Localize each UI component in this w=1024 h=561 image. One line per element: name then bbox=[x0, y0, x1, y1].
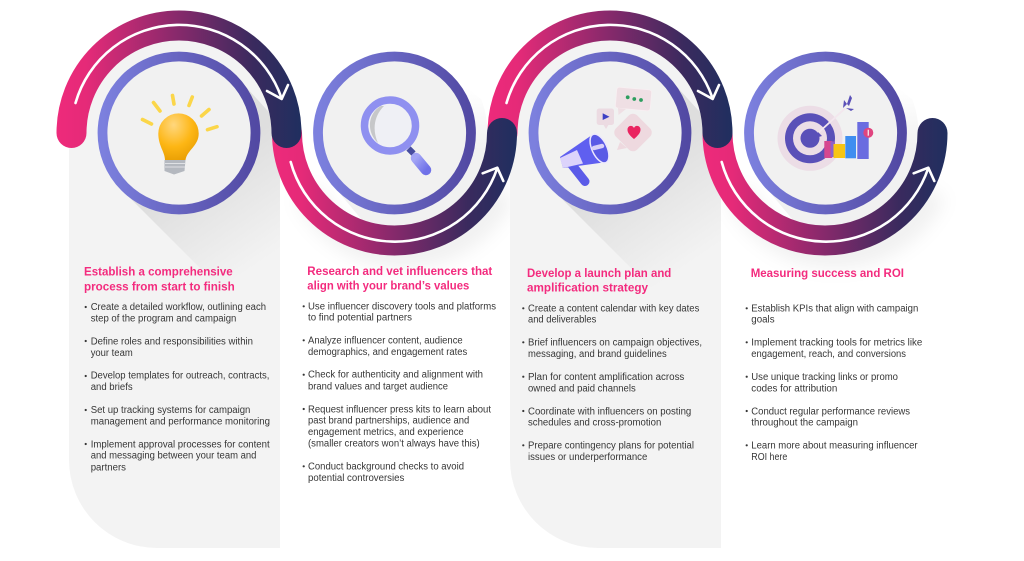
bullet: analyze: Analyze influencer content, audience bbox=[308, 336, 463, 347]
bullet: press kits: past brand partnerships, audience and bbox=[308, 416, 469, 427]
long shadow of circle 2 bbox=[340, 124, 487, 226]
bullet: roles: Define roles and responsibilities within bbox=[91, 336, 253, 347]
bullet: amplification: Plan for content amplification across bbox=[528, 372, 684, 383]
bullet: brief influencers: messaging, and brand guidelines bbox=[528, 349, 667, 360]
bullet: coordinate bbox=[522, 406, 691, 429]
bullet: learn more: Learn more about measuring influencer bbox=[751, 441, 918, 452]
bullet: templates: Develop templates for outreach, contracts, bbox=[91, 371, 269, 382]
bullet: discovery tools: Use influencer discovery tools and platforms bbox=[308, 301, 496, 312]
circle 3 bbox=[534, 56, 686, 210]
bullet: reviews: Conduct regular performance reviews bbox=[751, 406, 910, 417]
circle 2 bbox=[318, 56, 471, 210]
bullet: roles bbox=[85, 336, 253, 359]
band 2 bbox=[287, 133, 502, 240]
bullet: tracking: management and performance monitoring bbox=[91, 416, 270, 427]
bullet: tracking: Set up tracking systems for campaign bbox=[91, 405, 250, 416]
bullet: tracking tools: engagement, reach, and conversions bbox=[751, 349, 906, 360]
icon: light bulb bbox=[142, 96, 217, 174]
bullet: tracking tools bbox=[746, 338, 923, 360]
bullet: content calendar bbox=[522, 303, 699, 326]
bullet: approvals: and messaging between your team and bbox=[91, 451, 256, 462]
bullet: coordinate: schedules and cross-promotion bbox=[528, 418, 661, 429]
bullet: press kits: Request influencer press kits to learn about bbox=[308, 404, 491, 415]
bullet: roles: your team bbox=[91, 348, 133, 359]
panel background 3 bbox=[510, 33, 721, 548]
band 4 bbox=[718, 133, 932, 240]
heading: step 1: Establish a comprehensive bbox=[84, 265, 233, 279]
bullet: tracking links: codes for attribution bbox=[751, 383, 837, 394]
arrow on band 3 bbox=[506, 25, 719, 103]
bullet: background checks: potential controversies bbox=[308, 473, 404, 484]
bullet: press kits: engagement metrics, and experience bbox=[308, 427, 464, 438]
heading: step 2: align with your brand’s values bbox=[307, 279, 470, 293]
heading: step 4: Measuring success and ROI bbox=[751, 266, 904, 280]
bullet: workflow: step of the program and campaign bbox=[91, 314, 236, 325]
bullet: templates: and briefs bbox=[91, 382, 133, 393]
shadow under band 2 bbox=[307, 192, 502, 255]
bullet: press kits bbox=[303, 404, 491, 450]
band 1 bbox=[72, 26, 286, 133]
bullet: background checks bbox=[303, 462, 464, 484]
bullet: amplification: owned and paid channels bbox=[528, 383, 636, 394]
bullet: reviews bbox=[746, 406, 910, 429]
bullet: amplification bbox=[522, 372, 684, 394]
bullet: reviews: throughout the campaign bbox=[751, 418, 858, 429]
bullet: KPIs: Establish KPIs that align with campaign bbox=[751, 303, 918, 314]
arrow on band 2 bbox=[291, 162, 503, 242]
heading: step 1 bbox=[84, 265, 235, 293]
bullet: workflow bbox=[85, 302, 266, 325]
bullet: contingency: issues or underperformance bbox=[528, 452, 648, 463]
bullet: authenticity: Check for authenticity and alignment with bbox=[308, 370, 483, 381]
bullet: coordinate: Coordinate with influencers on posting bbox=[528, 406, 691, 417]
band 3 bbox=[502, 26, 718, 133]
bullet: content calendar: and deliverables bbox=[528, 315, 596, 326]
long shadow of circle 4 bbox=[771, 124, 918, 226]
circle 1 bbox=[102, 56, 256, 210]
arrow on band 4 bbox=[722, 162, 934, 242]
bullet: background checks: Conduct background checks to avoid bbox=[308, 462, 464, 473]
heading: step 2: Research and vet influencers that bbox=[307, 264, 492, 278]
icon: megaphone and message bubbles bbox=[560, 87, 654, 182]
bullet: tracking tools: Implement tracking tools for metrics like bbox=[751, 338, 923, 349]
heading: step 1: process from start to finish bbox=[84, 279, 235, 293]
heading: step 3 bbox=[527, 266, 671, 295]
long shadow of circle 1 bbox=[130, 88, 280, 258]
shadow under band 4 bbox=[738, 192, 933, 255]
bullet: press kits: (smaller creators won’t always have this) bbox=[308, 439, 480, 450]
bullet: tracking links bbox=[746, 372, 899, 394]
panel: step 2 text bbox=[303, 264, 496, 484]
icon: magnifying glass bbox=[364, 100, 426, 170]
bullet: content calendar: Create a content calendar with key dates bbox=[528, 303, 699, 314]
bullet: learn more: ROI here bbox=[751, 452, 788, 463]
bullet: workflow: Create a detailed workflow, outlining each bbox=[91, 302, 266, 313]
bullet: approvals bbox=[85, 439, 270, 473]
bullet: discovery tools: to find potential partners bbox=[308, 313, 412, 324]
bullet: analyze bbox=[303, 336, 467, 358]
bullet: KPIs bbox=[746, 303, 918, 326]
icon: target with arrow and bar chart bbox=[778, 95, 873, 171]
bullet: brief influencers bbox=[522, 338, 702, 360]
circle 4 bbox=[749, 56, 902, 210]
bullet: analyze: demographics, and engagement rates bbox=[308, 347, 467, 358]
panel background 1 bbox=[69, 33, 280, 548]
bullet: brief influencers: Brief influencers on campaign objectives, bbox=[528, 338, 702, 349]
bullet: tracking bbox=[85, 405, 270, 427]
panel: step 1 text bbox=[84, 265, 270, 473]
bullet: templates bbox=[85, 371, 269, 393]
heading: step 3: amplification strategy bbox=[527, 281, 648, 295]
bullet: approvals: partners bbox=[91, 462, 126, 473]
panel: step 3 text bbox=[522, 266, 702, 463]
bullet: authenticity bbox=[303, 370, 483, 392]
heading: step 2 bbox=[307, 264, 492, 293]
long shadow of circle 3 bbox=[561, 88, 718, 258]
bullet: approvals: Implement approval processes for content bbox=[91, 439, 270, 450]
bullet: learn more bbox=[746, 441, 918, 463]
bullet: authenticity: brand values and target audience bbox=[308, 381, 449, 392]
bullet: KPIs: goals bbox=[751, 315, 775, 326]
bullet: discovery tools bbox=[303, 301, 496, 324]
bullet: contingency bbox=[522, 441, 694, 463]
bullet: contingency: Prepare contingency plans for potential bbox=[528, 441, 694, 452]
heading: step 3: Develop a launch plan and bbox=[527, 266, 671, 280]
arrow on band 1 bbox=[76, 25, 288, 103]
panel: step 4 text bbox=[746, 266, 923, 463]
bullet: tracking links: Use unique tracking links or promo bbox=[751, 372, 899, 383]
